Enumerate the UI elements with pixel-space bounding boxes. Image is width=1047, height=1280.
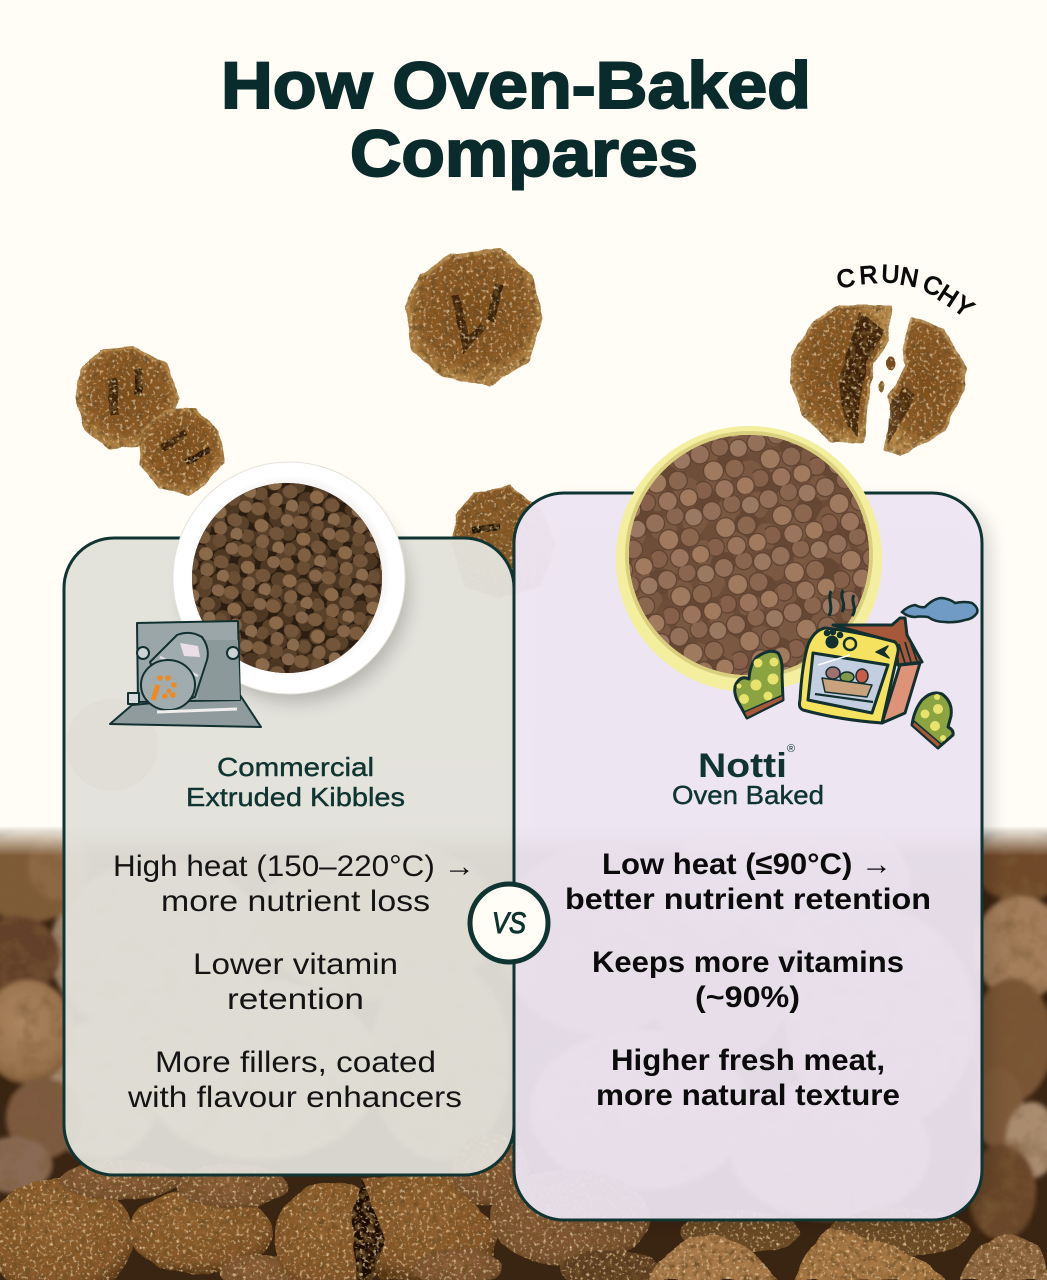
vs badge: VS — [492, 907, 526, 940]
icon: steam — [829, 590, 854, 616]
panel: notti oven baked — [514, 493, 982, 1220]
kibble: left pair — [77, 348, 223, 494]
background photo: pile of kibble — [0, 810, 1047, 1280]
hand-lettered label: crunchy: U — [881, 260, 900, 289]
icon: smoke cloud — [902, 598, 977, 622]
white bowl of extruded kibble — [173, 462, 408, 702]
yellow bowl of oven-baked kibble — [616, 426, 882, 692]
left panel points — [113, 850, 475, 1114]
icon: left oven mitt — [735, 651, 783, 718]
hand-lettered label: crunchy: Y — [948, 291, 979, 323]
title: Compares — [350, 116, 698, 190]
vs badge — [470, 884, 548, 962]
hand-lettered label: crunchy: C — [835, 264, 857, 294]
right panel points: more natural texture — [596, 1079, 900, 1112]
hand-lettered label: crunchy — [835, 260, 979, 323]
right panel points: Keeps more vitamins — [592, 946, 904, 979]
hand-lettered label: crunchy: N — [898, 262, 921, 293]
right panel heading: Notti — [698, 747, 787, 785]
hand-lettered label: crunchy: H — [933, 280, 963, 313]
panel shadow — [524, 500, 992, 1224]
icon: cartoon oven — [799, 618, 922, 723]
kibble ghost: lower left of panel — [66, 699, 158, 791]
right panel points — [565, 848, 931, 1112]
title — [221, 48, 811, 190]
right panel heading: ® — [787, 743, 795, 755]
hand-lettered label: crunchy: R — [858, 261, 878, 290]
left panel points: More fillers, coated — [155, 1046, 436, 1079]
icon: extruder machine — [110, 621, 261, 727]
kibble: behind panels — [452, 487, 555, 598]
kibble: top centre — [407, 251, 541, 384]
kibble: broken crunchy piece — [792, 307, 965, 455]
right panel heading — [672, 743, 824, 810]
right panel points: (~90%) — [695, 981, 800, 1014]
background fade into cream — [0, 790, 1047, 826]
title: How Oven-Baked — [221, 48, 811, 122]
left panel points: High heat (150–220°C) → — [113, 850, 475, 883]
icon: right oven mitt — [912, 693, 953, 748]
left panel heading: Commercial — [217, 752, 374, 782]
hand-lettered label: crunchy: C — [919, 270, 946, 302]
right panel points: better nutrient retention — [565, 883, 931, 916]
right panel points: Higher fresh meat, — [611, 1044, 885, 1077]
left panel points: more nutrient loss — [161, 885, 430, 918]
left panel points: retention — [227, 983, 364, 1016]
left panel points: with flavour enhancers — [127, 1081, 462, 1114]
left panel points: Lower vitamin — [193, 948, 398, 981]
panel: commercial extruded kibbles — [64, 538, 514, 1175]
left panel heading: Extruded Kibbles — [186, 782, 405, 812]
right panel heading: Oven Baked — [672, 780, 824, 810]
left panel heading — [186, 752, 405, 812]
right panel points: Low heat (≤90°C) → — [602, 848, 892, 881]
